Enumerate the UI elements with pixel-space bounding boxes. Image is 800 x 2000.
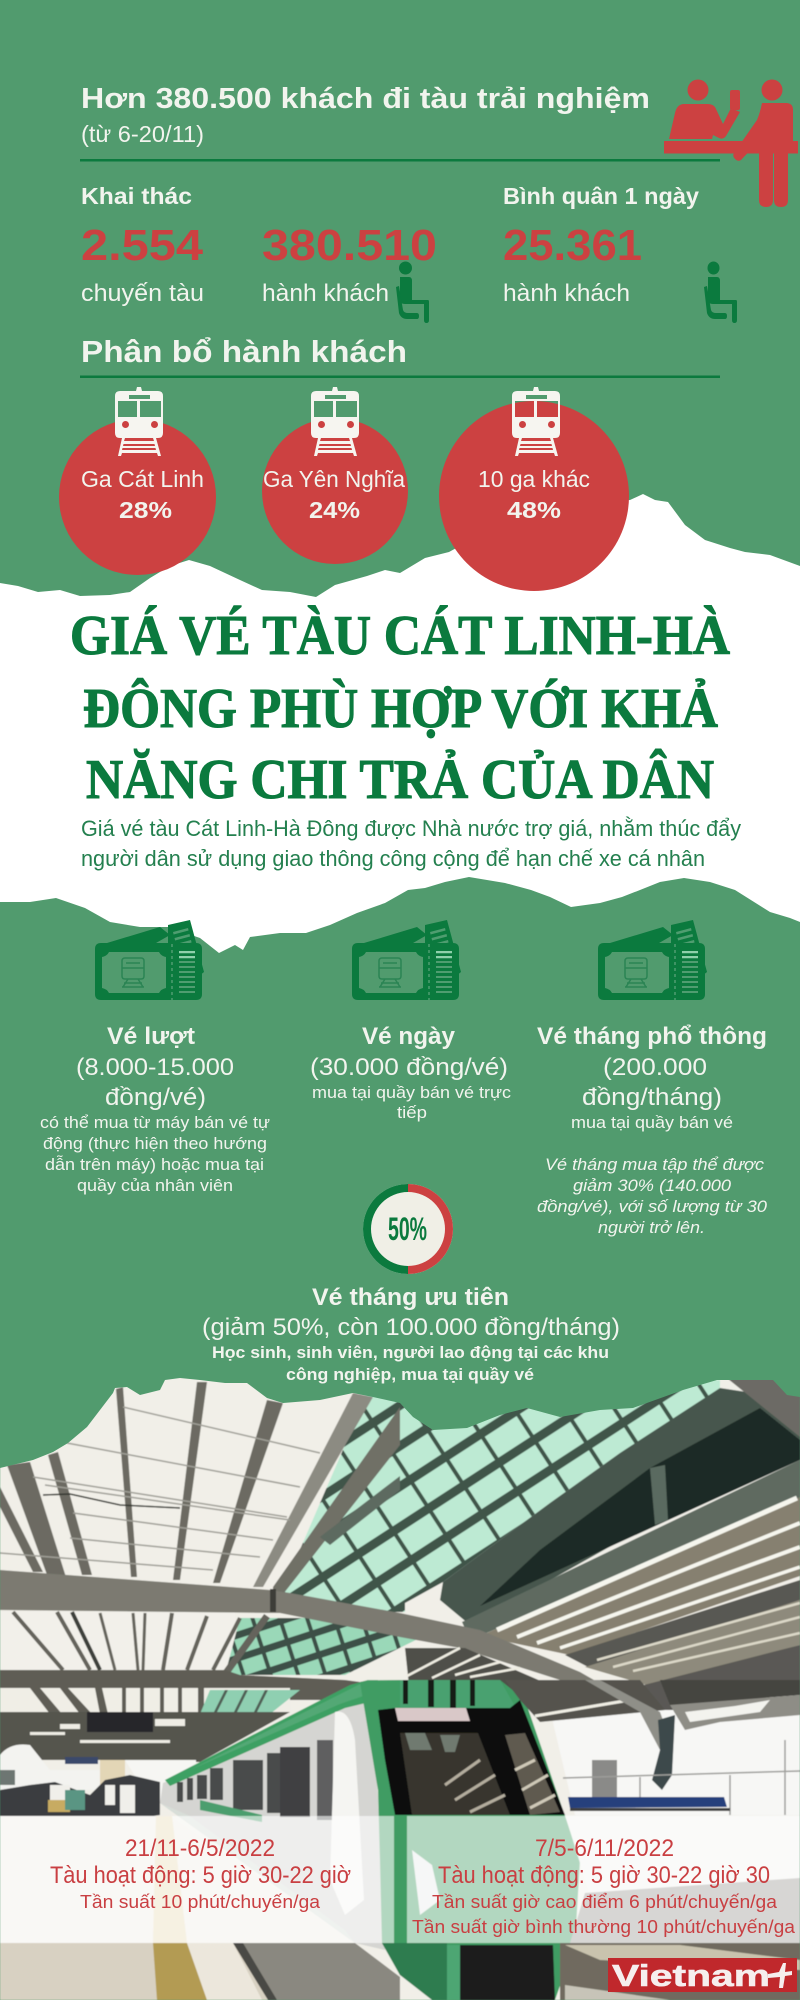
stats: khai thác: 2.554 [81,221,204,270]
icon: seated passenger [396,262,429,323]
ticket type: vé tháng phổ thông: người trở lên. [598,1218,705,1237]
floor [0,1815,152,1842]
stats: bình quân 1 ngày: Bình quân 1 ngày [503,183,699,209]
circle: 10 ga khác 48%: 48% [507,497,561,523]
stats: khai thác: 380.510 [262,221,437,270]
main title [70,605,731,811]
50% badge [363,1184,453,1274]
far left sky [0,1744,42,1761]
schedule: 7/5-6/11/2022 [412,1835,796,1937]
stats: khai thác: Khai thác [81,183,192,209]
schedule: 21/11-6/5/2022: 21/11-6/5/2022 [125,1835,275,1862]
stats: khai thác: chuyến tàu [81,280,204,307]
schedule: 7/5-6/11/2022: Tàu hoạt động: 5 giờ 30-22 giờ 30 [438,1862,770,1889]
sign board [87,1712,153,1732]
circle: Ga Yên Nghĩa 24%: Ga Yên Nghĩa [263,466,405,492]
ticket type: vé tháng phổ thông: đồng/vé), với số lượng từ 30 [537,1197,768,1216]
roof of cab stripes [400,1680,514,1709]
right platform [570,1833,580,1862]
dark trusses [480,1408,800,1606]
door [592,1760,617,1798]
logo: Vietnam+: Vietnam [612,1958,770,1993]
train side [160,1690,385,1950]
arched column [585,1680,672,1750]
icon: ticket counter with two people [664,80,798,207]
ticket type: vé lượt: động (thực hiện theo hướng [43,1134,267,1153]
right sky [550,1710,800,1815]
circle: Ga Cát Linh 28%: Ga Cát Linh [81,466,204,492]
50% badge: 50% [388,1211,427,1247]
subtitle: người dân sử dụng giao thông công cộng để hạn chế xe cá nhân [81,846,705,871]
icon: ticket [352,920,461,1000]
ticket type: vé lượt: (8.000-15.000 [76,1054,234,1081]
crowd [0,1774,161,1816]
lower mint [225,1618,440,1675]
left roof beams [0,1382,283,1590]
circle: 10 ga khác 48% [439,387,629,591]
mint panes upper [280,1380,720,1612]
ticket type: vé tháng ưu tiên [202,1284,620,1384]
ticket type: vé tháng phổ thông: giảm 30% (140.000 [573,1176,732,1195]
ticket type: vé ngày: tiếp [397,1103,427,1122]
ticket type: vé lượt: dẫn trên máy) hoặc mua tại [45,1155,264,1174]
ticket type: vé lượt: quầy của nhân viên [77,1176,233,1195]
heading: passenger distribution: Phân bổ hành khách [81,334,407,369]
main title: GIÁ VÉ TÀU CÁT LINH-HÀ [70,605,731,667]
ticket type: vé lượt: có thể mua từ máy bán vé tự [40,1113,270,1132]
main title: ĐÔNG PHÙ HỢP VỚI KHẢ [83,677,719,740]
right mid beam [404,1647,538,1690]
second left band [0,1670,420,1700]
ticket type: vé tháng phổ thông: Vé tháng mua tập thể được [545,1155,765,1174]
ticket type: vé lượt [40,1023,270,1195]
ticket type: vé ngày: mua tại quầy bán vé trực [312,1083,512,1102]
circle: 10 ga khác 48%: 10 ga khác [478,466,590,492]
frame under mint [440,1388,800,1625]
lower white panes left [0,1612,235,1672]
stats: bình quân 1 ngày: 25.361 [503,221,642,270]
circle: Ga Cát Linh 28% [59,387,216,575]
windshield right [505,1733,560,1815]
stats: khai thác: hành khách [262,280,389,307]
schedule: 7/5-6/11/2022: Tần suất giờ cao điểm 6 phút/chuyến/ga [432,1892,778,1912]
upper platform roof left [0,1687,291,1701]
ticket type: vé tháng ưu tiên: Học sinh, sinh viên, người lao động tại các khu [212,1343,609,1362]
circle: Ga Yên Nghĩa 24% [262,387,408,564]
ticket type: vé lượt: Vé lượt [107,1023,195,1050]
windshield left [400,1733,510,1815]
logo: Vietnam+ [608,1958,797,1993]
ticket type: vé tháng phổ thông: Vé tháng phổ thông [537,1023,767,1050]
ticket type: vé tháng ưu tiên: Vé tháng ưu tiên [312,1284,509,1311]
circle: Ga Cát Linh 28%: 28% [119,497,172,523]
ticket type: vé tháng ưu tiên: (giảm 50%, còn 100.000 đồng/tháng) [202,1314,620,1341]
ticket type: vé tháng phổ thông: đồng/tháng) [582,1084,722,1111]
main title: NĂNG CHI TRẢ CỦA DÂN [86,748,714,811]
schedule: 21/11-6/5/2022 [50,1835,351,1912]
beam diagonal green grey [462,1460,800,1640]
ticket type: vé tháng phổ thông [537,1023,768,1237]
upper right steps [505,1680,665,1722]
ticket type: vé ngày: (30.000 đồng/vé) [310,1054,508,1081]
schedule: 7/5-6/11/2022: 7/5-6/11/2022 [535,1835,674,1862]
schedule: 21/11-6/5/2022: Tàu hoạt động: 5 giờ 30-22 giờ [50,1862,351,1889]
subtitle: Giá vé tàu Cát Linh-Hà Đông được Nhà nước trợ giá, nhằm thúc đẩy [81,816,741,841]
schedule: 7/5-6/11/2022: Tần suất giờ bình thường 10 phút/chuyến/ga [412,1917,796,1937]
schedule: 21/11-6/5/2022: Tần suất 10 phút/chuyến/ga [80,1892,321,1912]
destination sign [395,1708,470,1721]
ticket type: vé ngày: Vé ngày [362,1023,456,1050]
roof under band [0,1712,290,1762]
stats: khai thác [81,183,437,307]
white torn band [0,494,800,953]
header: passengers trial: (từ 6-20/11) [81,121,204,147]
platform edge [233,1943,278,2000]
thin roof lines [0,1407,320,1570]
cab black frame [378,1700,565,1815]
ticket type: vé tháng ưu tiên: công nghiệp, mua tại quầy vé [286,1365,534,1384]
stats: bình quân 1 ngày: hành khách [503,280,630,307]
windows [177,1740,333,1820]
circle: Ga Yên Nghĩa 24%: 24% [309,497,360,523]
main beam across [0,1570,594,1681]
train front green [360,1680,580,2000]
tactile strip [153,1816,187,1943]
blue seats [568,1797,727,1808]
ticket type: vé lượt: đồng/vé) [105,1084,206,1111]
ticket type: vé tháng phổ thông: (200.000 [603,1054,707,1081]
right strip roof [480,1497,800,1655]
subtitle [81,816,741,871]
track [560,1943,800,2000]
lower roof beams [13,1612,267,1677]
cab lower [412,1850,440,1915]
photo: train at elevated station [0,1370,800,2000]
info backgrounds [0,1816,394,1943]
ticket type: vé ngày [310,1023,512,1122]
thick angled beam [273,1407,400,1607]
ticket type: vé tháng phổ thông: mua tại quầy bán vé [571,1113,733,1132]
header: passengers trial: Hơn 380.500 khách đi tàu trải nghiệm [81,83,650,115]
icon: ticket [598,920,707,1000]
icon: ticket [95,920,204,1000]
stats: bình quân 1 ngày [503,183,699,307]
icon: seated passenger [704,262,737,323]
right ground [570,1878,800,1943]
big grey beam top right [728,1380,800,1437]
header: passengers trial [80,83,720,162]
